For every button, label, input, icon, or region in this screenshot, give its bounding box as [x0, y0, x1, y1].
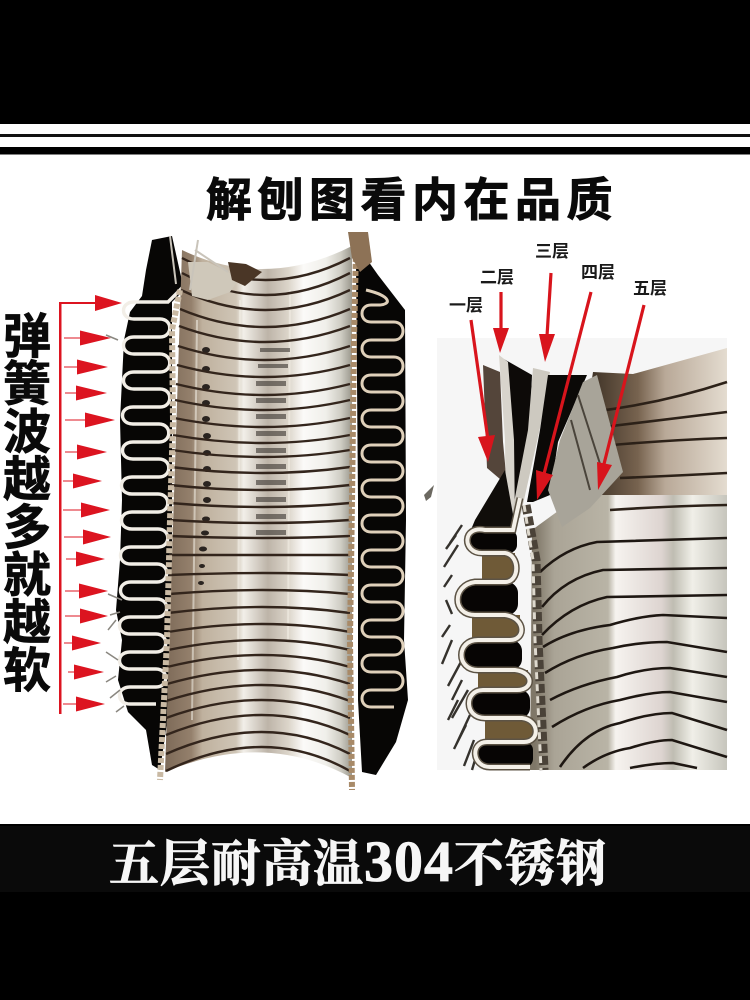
left photo: pipe cross-section [106, 232, 408, 790]
vertical caption: 就 [3, 550, 51, 602]
folded stack [526, 505, 544, 770]
layer labels: 五层 [633, 279, 667, 298]
black wedge [527, 375, 587, 502]
lower ribs [530, 495, 727, 770]
layer labels: 一层 [449, 296, 483, 315]
layer two silver edge [499, 355, 515, 522]
right seam [350, 250, 356, 790]
layer labels [449, 242, 667, 315]
vertical caption: 波 [3, 406, 51, 459]
vertical caption: 多 [3, 502, 51, 555]
coil top dark [470, 470, 516, 532]
right spring wave [362, 290, 403, 707]
ribbed inner wall [165, 246, 352, 778]
layer labels: 四层 [581, 263, 615, 282]
rib lines [166, 258, 350, 771]
left spring wave [120, 282, 188, 704]
vertical caption: 越 [3, 454, 51, 507]
left red arrows [59, 295, 122, 714]
frayed strands [442, 525, 478, 770]
vertical caption: 弹 [3, 311, 51, 364]
vertical caption: 越 [3, 597, 51, 650]
bottom caption band [0, 824, 750, 1000]
vertical caption: 软 [3, 645, 51, 698]
bottom caption: 五层耐高温304不锈钢 [109, 829, 607, 894]
lower rib lines [540, 538, 727, 768]
rib dark dots [198, 347, 211, 585]
red layer arrows [471, 273, 644, 500]
layer labels: 三层 [535, 242, 569, 261]
right photo: layered detail [424, 338, 727, 770]
right coil black backing [356, 258, 408, 775]
layer one piece [483, 365, 507, 485]
upper rib lines [590, 382, 727, 510]
layer four curved strip [548, 375, 623, 527]
left seam [160, 290, 180, 780]
torn top right edge [348, 232, 372, 272]
upper ribs [570, 348, 727, 520]
coil wave outline [458, 498, 536, 767]
left coil black backing [116, 236, 184, 770]
vertical caption: 簧 [3, 359, 51, 412]
layer three strip [511, 368, 550, 518]
loose speck [424, 485, 434, 501]
photo background [437, 338, 727, 770]
torn top left flaps [188, 262, 240, 300]
left frayed strands [106, 335, 124, 712]
rib vertical seams [192, 290, 290, 720]
white page area [0, 124, 750, 824]
top black band [0, 0, 750, 124]
coil wave [458, 498, 536, 767]
layer two dark panel [502, 358, 532, 518]
coil bays dark [458, 530, 533, 767]
title: 解刨图看内在品质 [206, 174, 618, 226]
rib dark shadows [256, 348, 290, 535]
layer labels: 二层 [480, 268, 514, 287]
coil bays brown [472, 553, 533, 742]
